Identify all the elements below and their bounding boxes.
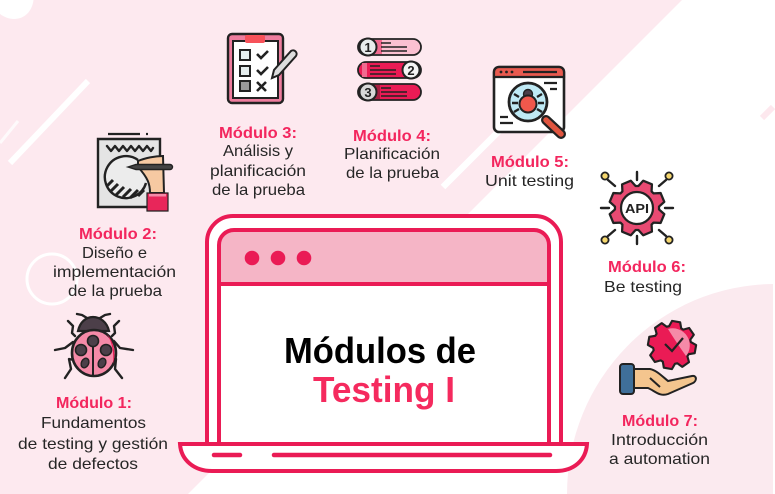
text: módulo 3: Módulo 3: — [219, 125, 297, 142]
text: módulo 2 — [53, 226, 176, 300]
text: módulo 7: Introducción — [611, 432, 708, 449]
text: módulo 5: Módulo 5: — [491, 154, 569, 171]
text: módulo 6 — [604, 259, 686, 296]
icon: numbered steps: 1 — [364, 40, 372, 55]
text: módulo 3: de la prueba — [212, 182, 305, 199]
text: módulo 1: Fundamentos — [41, 415, 146, 432]
text: módulo 7 — [609, 413, 710, 468]
laptop base — [180, 444, 587, 471]
text: módulo 1: de testing y gestión — [18, 436, 168, 453]
icon: numbered steps: 3 — [364, 85, 372, 100]
window dots — [245, 251, 311, 265]
icon: bug under magnifier — [494, 67, 564, 134]
icon: numbered steps — [358, 38, 421, 100]
icon: ladybug — [55, 314, 133, 378]
icon: api gear — [601, 172, 673, 244]
text: módulo 4: Módulo 4: — [353, 128, 431, 145]
laptop illustration — [180, 216, 587, 471]
icon: checklist clipboard — [228, 34, 297, 103]
text: módulo 6: Módulo 6: — [608, 259, 686, 276]
text: módulo 5: Unit testing — [485, 173, 574, 190]
text: módulo 3: Análisis y — [223, 143, 293, 160]
text: módulo 3 — [210, 125, 306, 199]
text: módulo 2: Diseño e — [82, 245, 147, 262]
text: módulo 1: Módulo 1: — [56, 395, 132, 412]
title — [284, 330, 476, 410]
text: módulo 6: Be testing — [604, 279, 682, 296]
text: módulo 4: de la prueba — [346, 165, 439, 182]
text: módulo 7: Módulo 7: — [622, 413, 698, 430]
text: módulo 3: planificación — [210, 163, 306, 180]
text: módulo 7: a automation — [609, 451, 710, 468]
icon: api gear: API — [625, 201, 649, 216]
icon: numbered steps: 2 — [407, 63, 415, 78]
text: módulo 5 — [485, 154, 574, 190]
icon: hand holding gear — [620, 317, 700, 395]
text: módulo 2: implementación — [53, 264, 176, 281]
text: módulo 4: Planificación — [344, 146, 440, 163]
title: Módulos de — [284, 330, 476, 371]
text: módulo 4 — [344, 128, 440, 182]
text: módulo 1: de defectos — [48, 456, 138, 473]
text: módulo 1 — [18, 395, 168, 473]
title: Testing I — [313, 369, 455, 410]
text: módulo 2: de la prueba — [68, 283, 162, 300]
icon: hand drawing — [98, 134, 172, 211]
text: módulo 2: Módulo 2: — [79, 226, 157, 243]
